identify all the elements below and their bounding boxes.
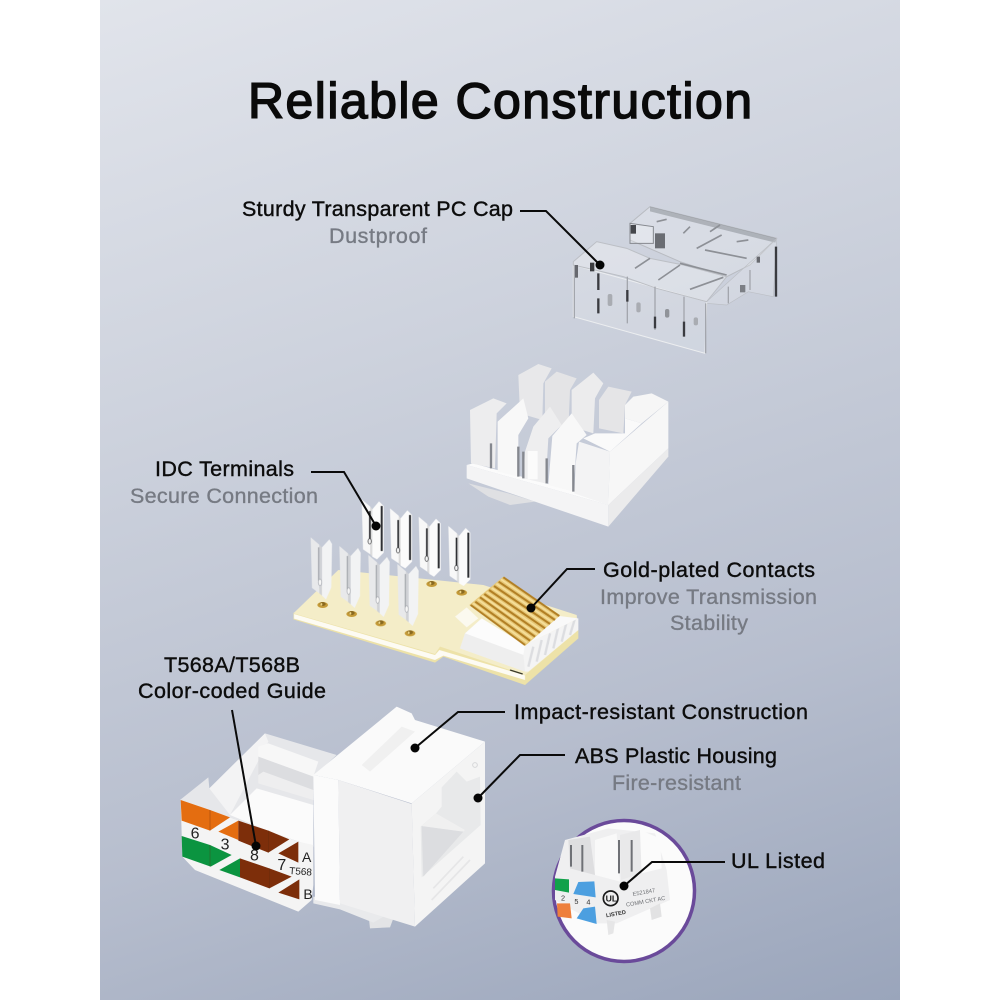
- front row of towers: [470, 398, 507, 468]
- colour-coded guide: A: [302, 849, 312, 865]
- callout: Gold-plated Contacts: Improve Transmission: [600, 585, 817, 609]
- colour-coded guide: 8: [250, 847, 259, 864]
- colour-coded guide: [181, 800, 313, 912]
- callout: Gold-plated Contacts: [526, 558, 817, 635]
- UL listed inset: [554, 820, 694, 962]
- callout: IDC Terminals: IDC Terminals: [155, 457, 294, 481]
- callout: Sturdy Transparent PC Cap: [242, 197, 604, 270]
- back-row IDC terminals: [362, 499, 470, 596]
- callout: UL Listed: [620, 849, 825, 890]
- callout: Gold-plated Contacts: Stability: [670, 611, 748, 635]
- base: [467, 465, 608, 527]
- callout: IDC Terminals: [130, 457, 380, 530]
- callout: Impact-resistant Construction: Impact-resistant Construction: [514, 700, 808, 724]
- component: transparent PC cap: [573, 207, 777, 353]
- colour-coded guide: 6: [191, 826, 200, 843]
- UL listed inset: E521847: [632, 888, 656, 898]
- UL listed inset: 5: [574, 897, 578, 906]
- callout: IDC Terminals: Secure Connection: [130, 484, 318, 508]
- component: terminals and gold contact board: [293, 499, 578, 685]
- UL listed inset: UL: [606, 893, 618, 903]
- callout: UL Listed: UL Listed: [731, 849, 825, 873]
- UL listed inset: 2: [561, 894, 565, 903]
- callout: Impact-resistant Construction: [410, 700, 808, 752]
- gold contacts: [469, 577, 559, 646]
- callout: T568A/T568B Color-coded Guide: [138, 653, 326, 850]
- callout: T568A/T568B Color-coded Guide: Color-coded Guide: [138, 679, 326, 703]
- UL listed inset: COMM CKT AC: [626, 896, 666, 909]
- component: keystone jack housing: [180, 707, 485, 928]
- colour-coded guide: B: [303, 886, 313, 902]
- colour-coded guide: 3: [221, 837, 230, 854]
- component: white insulation block: [467, 364, 668, 527]
- callout: ABS Plastic Housing: ABS Plastic Housing: [575, 744, 777, 768]
- callout: Gold-plated Contacts: Gold-plated Contacts: [603, 558, 815, 582]
- callout: T568A/T568B Color-coded Guide: T568A/T568B: [164, 653, 300, 677]
- UL listed inset: LISTED: [606, 910, 626, 919]
- callout: ABS Plastic Housing: [474, 744, 777, 802]
- colour-coded guide: 7: [277, 857, 286, 874]
- front-row IDC terminals: [311, 537, 419, 636]
- right wall: [625, 393, 668, 423]
- callout: Sturdy Transparent PC Cap: Sturdy Transparent PC Cap: [242, 197, 513, 221]
- gradient panel: [100, 0, 900, 1000]
- colour-coded guide: T568: [289, 866, 313, 879]
- UL listed inset: 4: [586, 898, 590, 907]
- callout: Sturdy Transparent PC Cap: Dustproof: [329, 224, 427, 248]
- callout: ABS Plastic Housing: Fire-resistant: [612, 771, 741, 795]
- back row of towers: [518, 364, 552, 420]
- white contact block: [460, 618, 578, 672]
- title: Reliable Construction: [248, 73, 752, 129]
